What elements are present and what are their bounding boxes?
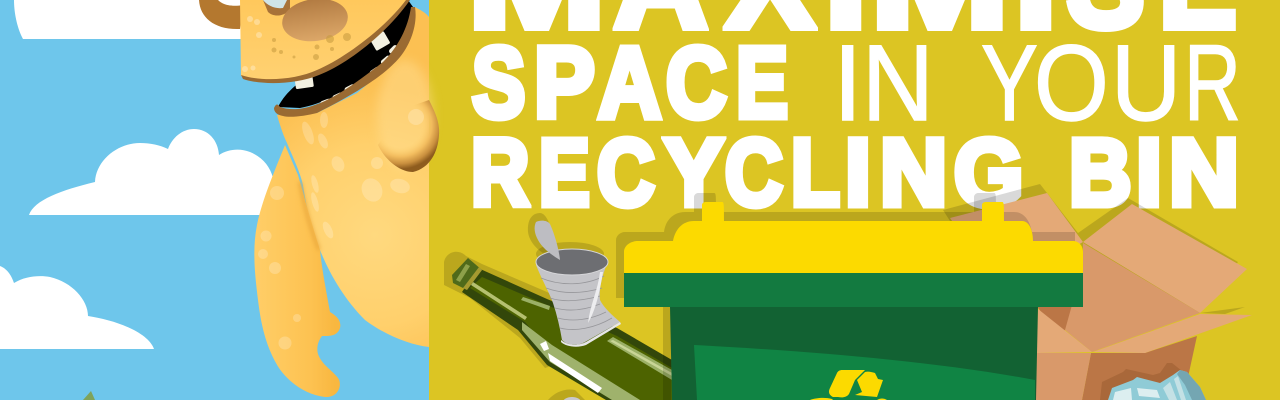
mascot mouth bbox=[278, 0, 413, 108]
mascot shoulder tip bbox=[378, 100, 439, 172]
title: L bbox=[791, 120, 840, 226]
mascot eye bbox=[263, 0, 290, 16]
can highlight bbox=[588, 272, 603, 323]
bottle shadow bbox=[444, 252, 600, 368]
box right lower flap bbox=[1093, 314, 1252, 353]
bin rim bbox=[624, 273, 1083, 307]
box left face bbox=[1034, 353, 1091, 400]
title: I bbox=[833, 22, 862, 143]
box right upper flap bbox=[1083, 204, 1247, 313]
mascot shoulder light bbox=[377, 60, 433, 170]
box inside face bbox=[1065, 243, 1200, 352]
title: G bbox=[954, 120, 1023, 226]
title: I bbox=[845, 120, 871, 226]
bottle neck stripe bbox=[471, 282, 527, 320]
recycling arrow left bbox=[829, 370, 865, 397]
recycling arrow right bbox=[855, 372, 883, 397]
title: C bbox=[596, 120, 654, 226]
title: C bbox=[666, 27, 727, 139]
title: Y bbox=[664, 120, 723, 226]
cloud: middle bbox=[29, 129, 273, 215]
mascot spots bbox=[258, 109, 424, 350]
bottle dark silhouette bbox=[462, 268, 672, 400]
title: O bbox=[1034, 22, 1109, 143]
item shadows bbox=[444, 193, 1075, 400]
bottle white reflection bbox=[540, 341, 602, 393]
box right face bbox=[1082, 336, 1197, 400]
can ridges bbox=[541, 276, 612, 330]
box flap shadow bbox=[943, 184, 1238, 313]
title: E bbox=[736, 27, 788, 139]
mascot arm crease bbox=[300, 182, 319, 250]
bin front panel bbox=[694, 345, 1035, 400]
bin body shadow bbox=[663, 300, 671, 400]
can bottom edge bbox=[561, 322, 621, 347]
title: I bbox=[1136, 120, 1162, 226]
title: C bbox=[724, 120, 782, 226]
bottle thin highlight bbox=[610, 340, 672, 376]
bottle bbox=[452, 258, 672, 400]
can lid shadow bbox=[528, 213, 556, 253]
bottle upper stripe bbox=[521, 297, 550, 310]
bin lid bbox=[624, 202, 1083, 273]
mascot teeth bbox=[294, 31, 399, 107]
mascot lower lip bbox=[274, 7, 416, 117]
plastic bottle ribs bbox=[1163, 376, 1186, 400]
can body bbox=[536, 263, 620, 345]
title: R bbox=[471, 120, 529, 226]
mascot: yellow monster bbox=[199, 0, 439, 397]
mascot highlights bbox=[242, 16, 262, 72]
title: N bbox=[862, 22, 934, 143]
bottle neck label bbox=[456, 264, 470, 282]
box left flap bbox=[1036, 309, 1092, 353]
title: E bbox=[539, 120, 590, 226]
title line: IN YOUR bbox=[833, 22, 1241, 143]
recycling arrow bottom bbox=[810, 398, 887, 400]
title: S bbox=[472, 27, 526, 139]
title: A bbox=[598, 27, 661, 139]
plastic bottle bbox=[1108, 370, 1206, 400]
bin body bbox=[670, 307, 1038, 400]
box back flap bbox=[950, 193, 1083, 290]
mascot nose bbox=[279, 0, 351, 45]
title: B bbox=[1068, 120, 1131, 226]
panel: yellow background bbox=[429, 0, 1280, 400]
bottle lower band bbox=[522, 322, 640, 400]
mascot eye white bbox=[263, 0, 287, 8]
icon: leaf tip bbox=[83, 391, 95, 400]
mascot ear bbox=[199, 0, 243, 29]
mascot head bbox=[240, 0, 408, 81]
bottle body bbox=[470, 277, 672, 400]
cloud: lower bbox=[0, 266, 154, 349]
cloud: top bbox=[14, 0, 250, 39]
can bbox=[535, 221, 621, 347]
bottle light stripe bbox=[607, 337, 672, 380]
can rim shadow bbox=[536, 242, 604, 266]
plastic bottle neck bbox=[1177, 370, 1206, 400]
can lid bbox=[535, 221, 560, 260]
title: N bbox=[1169, 120, 1239, 226]
box inside dark bbox=[1036, 305, 1072, 335]
panel: sky background bbox=[0, 0, 429, 400]
icon: recycling symbol bbox=[810, 370, 887, 400]
title: R bbox=[1184, 22, 1241, 143]
box shadows bbox=[943, 184, 1245, 314]
mascot upper lip bbox=[241, 0, 410, 83]
small can shadow bbox=[548, 389, 585, 400]
title bbox=[468, 0, 1241, 226]
box bbox=[950, 193, 1252, 400]
mascot freckles bbox=[272, 33, 351, 60]
bin bbox=[624, 202, 1083, 400]
bottle neck ring bbox=[463, 267, 482, 290]
can inner bbox=[536, 249, 608, 275]
title: U bbox=[1110, 22, 1181, 143]
mascot arm bbox=[254, 145, 340, 397]
title line: RECYCLING BIN bbox=[471, 120, 1239, 226]
plastic bottle reflections bbox=[1113, 388, 1160, 400]
mascot ear inner bbox=[218, 0, 243, 6]
bin lid shadow bbox=[616, 193, 1075, 298]
title line: SPACE bbox=[470, 27, 788, 139]
mascot torso bbox=[277, 7, 429, 347]
title: P bbox=[534, 27, 595, 139]
plastic bottle shadow bbox=[1100, 363, 1187, 400]
small can top bbox=[563, 397, 581, 400]
title: N bbox=[880, 120, 947, 226]
title: Y bbox=[981, 22, 1038, 143]
box lower flap shadow bbox=[1200, 307, 1245, 314]
bottle neck bbox=[452, 258, 482, 290]
